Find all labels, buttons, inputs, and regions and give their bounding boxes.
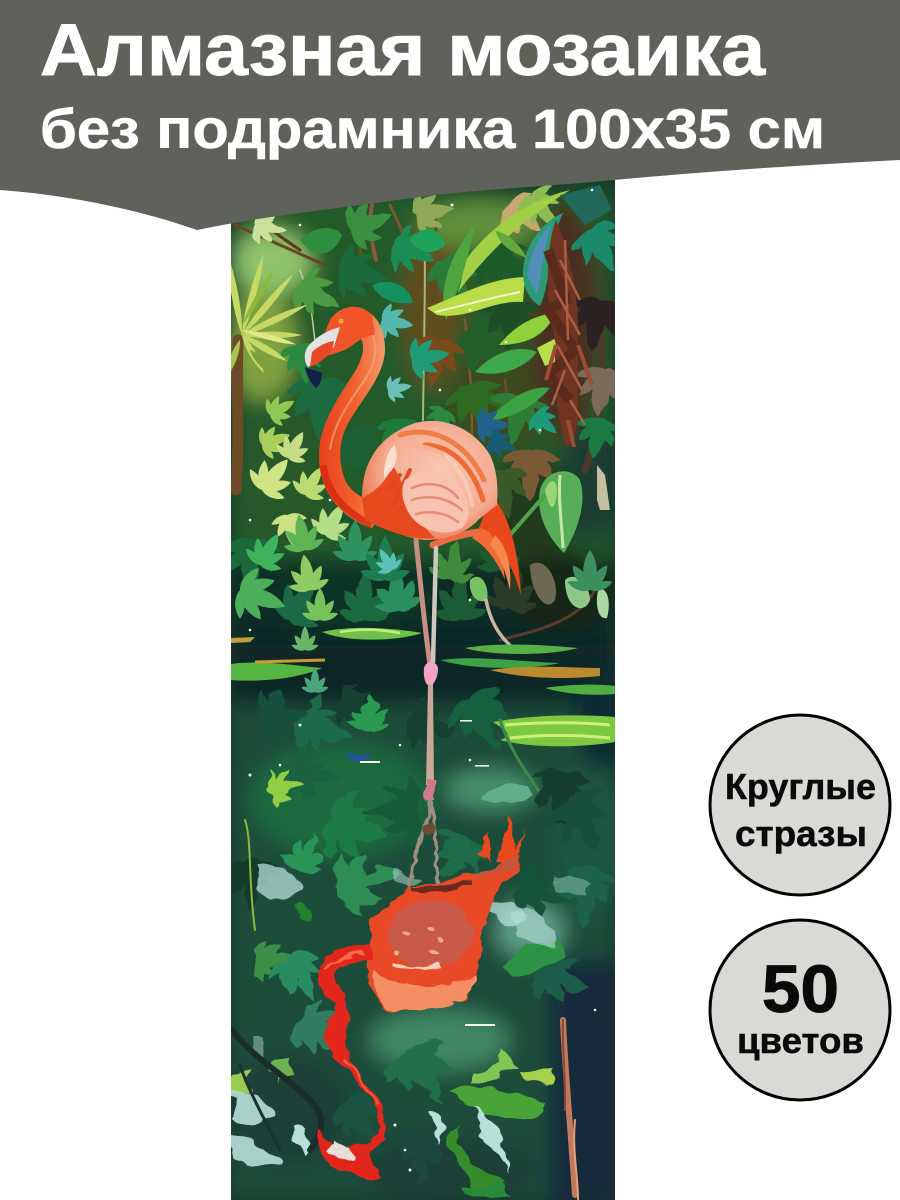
dark branches in water bbox=[232, 720, 578, 1200]
jungle background colour masses bbox=[228, 190, 620, 660]
lily pads and pond surface bbox=[231, 626, 615, 746]
neck bbox=[319, 309, 385, 528]
reflected tail bbox=[477, 815, 525, 866]
sparkle dots bbox=[248, 189, 596, 1171]
upper jungle leaves bbox=[300, 185, 612, 420]
badge: round rhinestones: Круглые bbox=[725, 766, 876, 807]
dense jungle foliage layer bbox=[231, 185, 615, 628]
head bbox=[324, 306, 375, 355]
header banner bbox=[0, 0, 900, 230]
badge: 50 colours: 50 bbox=[762, 952, 839, 1027]
badge: 50 colours: цветов bbox=[737, 1020, 864, 1061]
left palm fronds bbox=[231, 254, 307, 373]
wing streaks bbox=[388, 432, 484, 510]
brown hanging frond bbox=[546, 220, 592, 447]
water colour masses bbox=[230, 645, 630, 1200]
reflected neck bbox=[318, 945, 385, 1179]
knee joint bbox=[424, 662, 438, 686]
folded leg bbox=[433, 532, 512, 647]
subtitle: без подрамника 100х35 см bbox=[40, 97, 825, 160]
badge: 50 colours bbox=[710, 920, 890, 1100]
title: Алмазная мозаика bbox=[40, 10, 767, 91]
brown trunks and vines bbox=[235, 205, 601, 640]
water foliage reflections bbox=[219, 674, 627, 1195]
badge: round rhinestones bbox=[710, 715, 890, 895]
beak bbox=[305, 327, 340, 367]
blue petal in water bbox=[345, 752, 372, 761]
large right leaves bbox=[470, 465, 614, 618]
flamingo reflection bbox=[318, 780, 525, 1179]
reflected body bbox=[365, 855, 520, 1011]
pale aqua water highlights bbox=[232, 784, 590, 1172]
pale green leaf clusters on the left bbox=[235, 396, 410, 621]
body bbox=[362, 421, 497, 540]
tail plumes bbox=[472, 495, 521, 595]
teal leaf clusters near flamingo bbox=[380, 304, 556, 458]
flamingo legs bbox=[416, 540, 436, 665]
flamingo bbox=[305, 307, 521, 595]
reflected upper leg bbox=[426, 684, 434, 785]
wing feathers bbox=[402, 471, 469, 532]
painting: flamingo in tropical jungle bbox=[219, 177, 639, 1200]
badge: round rhinestones: стразы bbox=[735, 813, 867, 854]
